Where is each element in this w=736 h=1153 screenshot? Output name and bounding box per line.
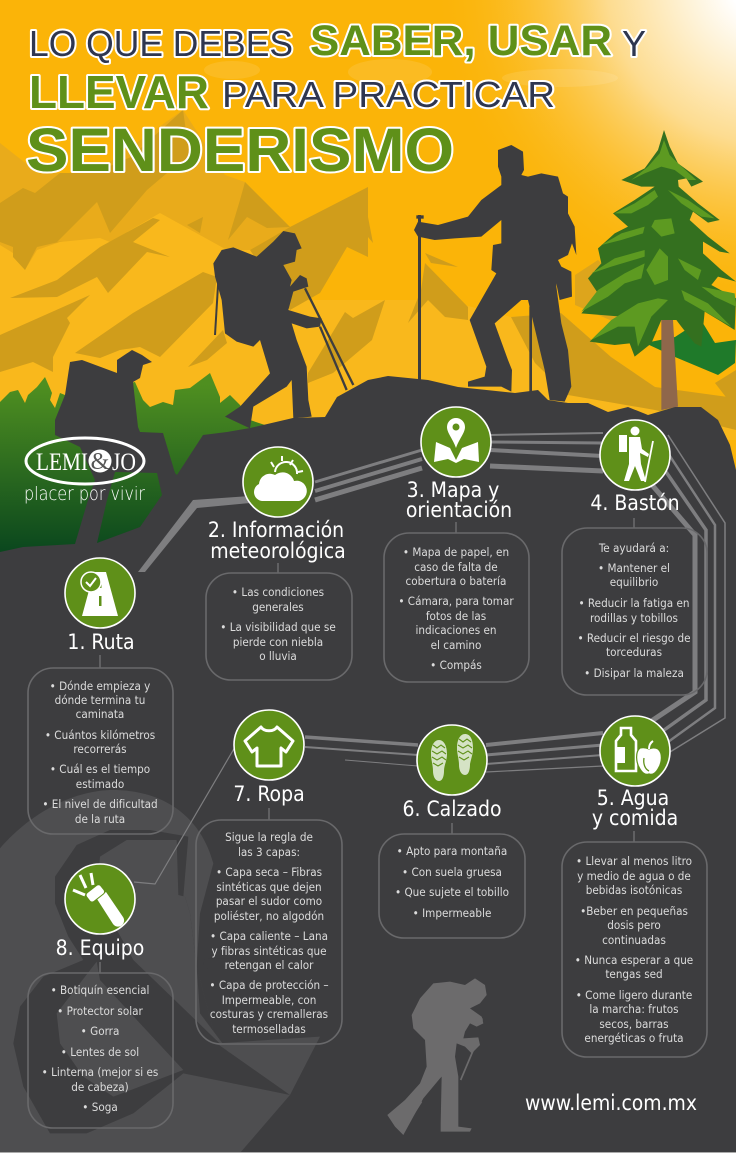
step 4: bastón: Te ayudará a: [598,541,669,555]
step 4: bastón: • Reducir la fatiga en [578,596,690,610]
title: LO QUE DEBES [29,23,293,64]
step 7: ropa: 7. Ropa [233,782,305,806]
website: www.lemi.com.mx [525,1091,697,1115]
step 2: información meteorológica: • La visibilidad que se [220,620,336,634]
step 4: bastón [562,420,707,695]
step 3: mapa y orientación: • Mapa de papel, en [403,545,509,559]
step 5: agua y comida: continuadas [602,933,666,947]
step 7: ropa: pasar el sudor como [216,894,322,908]
step 5: agua y comida: bebidas isotónicas [586,883,682,897]
step 7: ropa: y fibras sintéticas que [211,944,327,958]
icon: cloud and sun [243,447,313,517]
hiker: middle [213,231,353,428]
hiker silhouette: bottom [387,978,487,1135]
step 6: calzado [379,725,525,938]
title: Y [622,23,646,64]
title: PARA PRACTICAR [222,74,555,115]
step 4: bastón: • Disipar la maleza [584,666,684,680]
logo: JO [112,449,136,476]
logo [24,438,145,505]
step 5: agua y comida: • Nunca esperar a que [575,953,693,967]
step 3: mapa y orientación [384,407,529,682]
step 8: equipo: • Protector solar [57,1004,144,1018]
step 5: agua y comida: dosis pero [607,918,661,932]
icon: hiker [600,420,670,490]
step 5: agua y comida: secos, barras [599,1017,669,1031]
connector stems [100,518,634,973]
step 1: ruta [28,558,173,834]
step 1: ruta: recorrerás [73,742,127,756]
step 5: agua y comida: la marcha: frutos [589,1002,679,1016]
step 2: información meteorológica: • Las condiciones [232,585,324,599]
step 5: agua y comida [562,716,707,1057]
step 7: ropa [196,710,342,1044]
mountains [0,110,736,440]
step 3: mapa y orientación: el camino [431,638,481,652]
icon: footprints [417,725,487,795]
step 7: ropa: Impermeable, con [222,993,316,1007]
step 7: ropa: • Capa seca – Fibras [216,865,322,879]
step 7: ropa: Sigue la regla de [225,830,313,844]
ampersand watermark [0,790,320,1153]
step 4: bastón: • Mantener el [598,561,670,575]
rocky ground with left hiker [0,350,736,1153]
step 5: agua y comida: y medio de agua o de [577,869,691,883]
step 1: ruta: de la ruta [75,812,125,826]
tree [581,130,736,410]
step 5: agua y comida: energéticas o fruta [584,1031,684,1045]
step 8: equipo: • Soga [82,1100,118,1114]
step 1: ruta: • Cuál es el tiempo [50,762,150,776]
green patch behind tree [645,320,736,375]
step 6: calzado: • Con suela gruesa [402,865,502,879]
step 5: agua y comida: •Beber en pequeñas [580,904,688,918]
step 8: equipo: • Lentes de sol [61,1045,139,1059]
step 1: ruta: • Dónde empieza y [50,679,150,693]
title: LLEVAR [29,66,209,118]
step 1: ruta: 1. Ruta [67,630,135,654]
step 7: ropa: costuras y cremalleras [210,1007,328,1021]
step 1: ruta: estimado [76,777,124,791]
step 7: ropa: termoselladas [232,1022,306,1036]
step 2: información meteorológica: o lluvia [259,649,297,663]
logo: LEMI [36,449,88,476]
step 4: bastón: rodillas y tobillos [590,611,678,625]
step 6: calzado: 6. Calzado [402,797,502,821]
step 5: agua y comida: 5. Agua [597,786,669,810]
route connector lines [134,433,725,884]
icon: flashlight [65,864,135,934]
hiker: main [414,145,576,402]
step 8: equipo: • Botiquín esencial [51,983,149,997]
step 6: calzado: • Apto para montaña [397,844,507,858]
step 3: mapa y orientación: caso de falta de [414,560,498,574]
step 2: información meteorológica: 2. Información [208,518,344,542]
step 7: ropa: las 3 capas: [238,845,300,859]
step 4: bastón: torceduras [606,645,662,659]
step 1: ruta: caminata [76,707,124,721]
step 3: mapa y orientación: cobertura o batería [406,574,506,588]
step 4: bastón: equilibrio [610,575,658,589]
step 4: bastón: • Reducir el riesgo de [577,631,691,645]
step 7: ropa: • Capa de protección – [209,978,329,992]
step 5: agua y comida: • Come ligero durante [576,988,692,1002]
step 3: mapa y orientación: • Cámara, para tomar [398,594,514,608]
step 3: mapa y orientación: orientación [406,498,512,522]
forest [0,373,280,570]
step 7: ropa: sintéticas que dejen [216,880,322,894]
step 2: información meteorológica: meteorológica [210,539,346,563]
title: SENDERISMO [26,116,454,184]
step 8: equipo: 8. Equipo [56,936,144,960]
step 6: calzado: • Impermeable [413,906,491,920]
icon: bottle and apple [600,716,670,786]
icon: t-shirt [234,710,304,780]
step 5: agua y comida: y comida [592,806,678,830]
step 2: información meteorológica: pierde con niebla [233,635,323,649]
title [26,17,646,184]
step 1: ruta: • El nivel de dificultad [42,797,158,811]
icon: road [65,558,135,628]
step 7: ropa: poliéster, no algodón [214,909,324,923]
sky background [0,0,736,560]
step 8: equipo: • Gorra [81,1024,119,1038]
step 7: ropa: retengan el calor [225,958,314,972]
clouds [204,59,618,87]
step 8: equipo [28,864,173,1128]
step 3: mapa y orientación: indicaciones en [416,623,496,637]
step 7: ropa: • Capa caliente – Lana [210,929,328,943]
step 5: agua y comida: • Llevar al menos litro [576,854,692,868]
step 2: información meteorológica: generales [252,600,304,614]
step 4: bastón: 4. Bastón [590,491,680,515]
step 3: mapa y orientación: fotos de las [426,609,486,623]
logo: & [91,449,110,475]
step 8: equipo: de cabeza) [71,1080,129,1094]
step 3: mapa y orientación: • Compás [430,658,482,672]
step 6: calzado: • Que sujete el tobillo [395,885,509,899]
logo: placer por vivir [24,483,145,505]
step 3: mapa y orientación: 3. Mapa y [407,478,499,502]
step 1: ruta: • Cuántos kilómetros [45,728,155,742]
step 5: agua y comida: tengas sed [605,967,663,981]
icon: map pin [421,407,491,477]
title: SABER, USAR [310,17,612,65]
step 1: ruta: dónde termina tu [55,693,145,707]
step 8: equipo: • Linterna (mejor si es [42,1065,158,1079]
step 2: información meteorológica [206,447,352,680]
bottom edge line [0,1152,736,1153]
